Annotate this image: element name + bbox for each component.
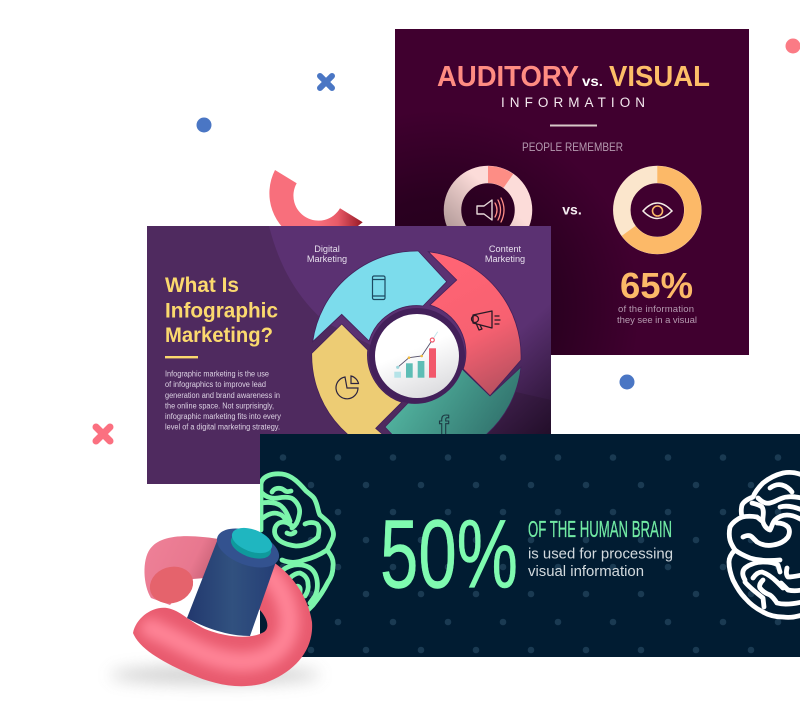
label: digital marketing: Digital (314, 244, 340, 254)
caption: visual stat (617, 304, 697, 326)
label: digital marketing (307, 244, 347, 264)
paragraph: infographic marketing fits into every (165, 412, 281, 421)
divider (165, 356, 198, 358)
decorative blue dot (196, 118, 212, 132)
panel: auditory vs visual (395, 29, 749, 355)
heading: auditory vs visual (437, 61, 710, 93)
donut: auditory (452, 166, 524, 246)
paragraph: level of a digital marketing strategy. (165, 423, 280, 432)
panel: what is infographic marketing (147, 226, 551, 484)
icon: megaphone (472, 311, 500, 330)
description: visual information (528, 564, 644, 580)
heading: of the human brain: OF THE HUMAN BRAIN (528, 516, 672, 542)
caption: visual stat: they see in a visual (617, 315, 697, 326)
paragraph: the online space. Not surprisingly, (165, 402, 274, 410)
paragraph (165, 370, 281, 432)
heading: auditory vs visual: VISUAL (609, 61, 710, 93)
heading: what is infographic marketing: Infographic (165, 298, 278, 322)
description (528, 546, 673, 580)
torus upper arc (144, 536, 225, 609)
heading: auditory vs visual: vs. (582, 73, 603, 89)
decorative pink dot (786, 38, 800, 54)
cylinder teal top (228, 523, 275, 564)
divider (550, 124, 597, 126)
label: people remember: PEOPLE REMEMBER (522, 142, 623, 154)
label: digital marketing: Marketing (307, 254, 347, 264)
paragraph: generation and brand awareness in (165, 391, 280, 400)
paragraph: Infographic marketing is the use (165, 370, 269, 378)
torus lower sweep (133, 560, 312, 686)
icon: white brain (729, 472, 800, 617)
panel: human brain stat (260, 434, 800, 657)
segment: red (428, 252, 521, 396)
heading: what is infographic marketing: Marketing? (165, 323, 273, 347)
subheading: information: INFORMATION (501, 95, 645, 110)
caption: visual stat: of the information (618, 304, 694, 315)
dot pattern (280, 454, 781, 653)
segment: yellow (312, 324, 402, 458)
label: content marketing: Marketing (485, 254, 525, 264)
ground shadow (110, 666, 320, 684)
3D torus and cylinder object (110, 521, 320, 686)
segment: cyan (313, 251, 447, 342)
decorative blue cross (320, 76, 332, 88)
label: vs: vs. (562, 202, 582, 218)
heading: what is infographic marketing (165, 273, 278, 347)
icon: speaker (477, 198, 504, 222)
label: content marketing (485, 244, 525, 264)
decorative red cross (96, 427, 110, 441)
description: is used for processing (528, 546, 673, 562)
segment: teal (385, 367, 521, 461)
cylinder (187, 521, 284, 636)
stat: 50%: 50% (380, 500, 518, 608)
stat: 65%: 65% (620, 265, 693, 306)
icon: mint brain (261, 474, 334, 612)
label: content marketing: Content (489, 244, 522, 254)
torus cap (145, 561, 198, 609)
icon: facebook f: f (439, 411, 449, 443)
icon: pie chart (336, 376, 358, 399)
icon: eye (643, 203, 672, 218)
paragraph: of infographics to improve lead (165, 380, 266, 389)
decorative blue dot right (620, 374, 634, 390)
wheel diagram (312, 251, 521, 461)
heading: auditory vs visual: AUDITORY (437, 61, 579, 93)
heading: what is infographic marketing: What Is (165, 273, 239, 297)
icon: phone (372, 276, 385, 300)
center circle with chart (375, 314, 459, 398)
donut: visual (622, 166, 701, 254)
decorative red ring segment (269, 170, 363, 240)
